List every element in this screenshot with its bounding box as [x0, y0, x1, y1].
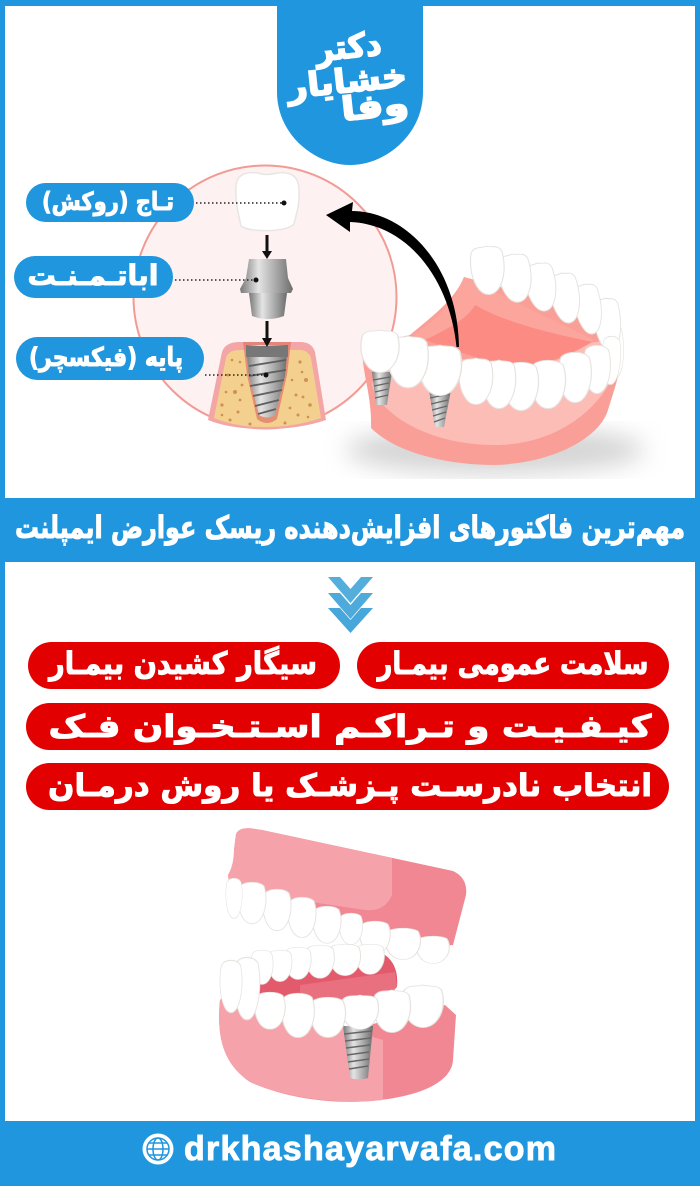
jaw shadow — [345, 426, 645, 474]
logo text: دکتر — [312, 24, 383, 71]
illustration: lower jaw with implants — [345, 245, 645, 474]
lower gum — [219, 995, 456, 1102]
lower back teeth — [251, 944, 384, 984]
factor: general health: سلامت عمومی بیمـار — [376, 646, 648, 682]
arrow: abutment to fixture — [262, 321, 272, 347]
chevrons — [328, 577, 373, 633]
implant: front — [429, 390, 451, 427]
footer band — [0, 1121, 700, 1186]
bone section — [208, 342, 326, 429]
implant: rear — [372, 372, 392, 405]
back teeth — [469, 245, 625, 378]
logo badge — [277, 0, 423, 165]
title band — [0, 498, 700, 562]
arrow: crown to abutment — [262, 235, 272, 259]
abutment — [240, 259, 293, 319]
crown — [236, 173, 299, 231]
label: abutment — [14, 256, 258, 298]
front teeth — [361, 330, 621, 411]
logo text: وفا — [339, 83, 411, 130]
factor: bone quality — [26, 703, 669, 750]
label: fixture: پایه (فیکسچر) — [29, 343, 183, 373]
icon: globe — [142, 1134, 174, 1164]
factor: general health — [357, 642, 669, 689]
implant diagram circle — [134, 166, 396, 429]
label: fixture — [16, 337, 268, 380]
label: abutment: اباتـمـنـت — [28, 259, 158, 292]
illustration: open denture — [219, 828, 466, 1102]
factor: bone quality: کیـفـیـت و تـراکـم اسـتـخـوان فـک — [48, 709, 653, 745]
factor: smoking: سیگار کشیدن بیمـار — [47, 645, 317, 682]
lower front teeth — [220, 957, 443, 1038]
factor: smoking — [28, 642, 340, 689]
label: crown — [26, 183, 286, 222]
mouth floor — [413, 277, 594, 372]
website: drkhashayarvafa.com — [184, 1130, 556, 1168]
mouth interior — [250, 955, 397, 1000]
upper teeth — [226, 878, 449, 964]
upper gum — [228, 828, 466, 950]
logo text — [280, 21, 412, 136]
implant — [343, 1026, 373, 1080]
logo text: خشایار — [283, 55, 409, 107]
jaw gum — [362, 277, 620, 465]
factor: wrong choice: انتخاب نادرسـت پـزشـک یا روش درمـان — [48, 768, 652, 804]
curved arrow — [326, 202, 459, 347]
fixture — [243, 342, 291, 423]
label: crown: تـاج (روکش) — [42, 187, 174, 217]
